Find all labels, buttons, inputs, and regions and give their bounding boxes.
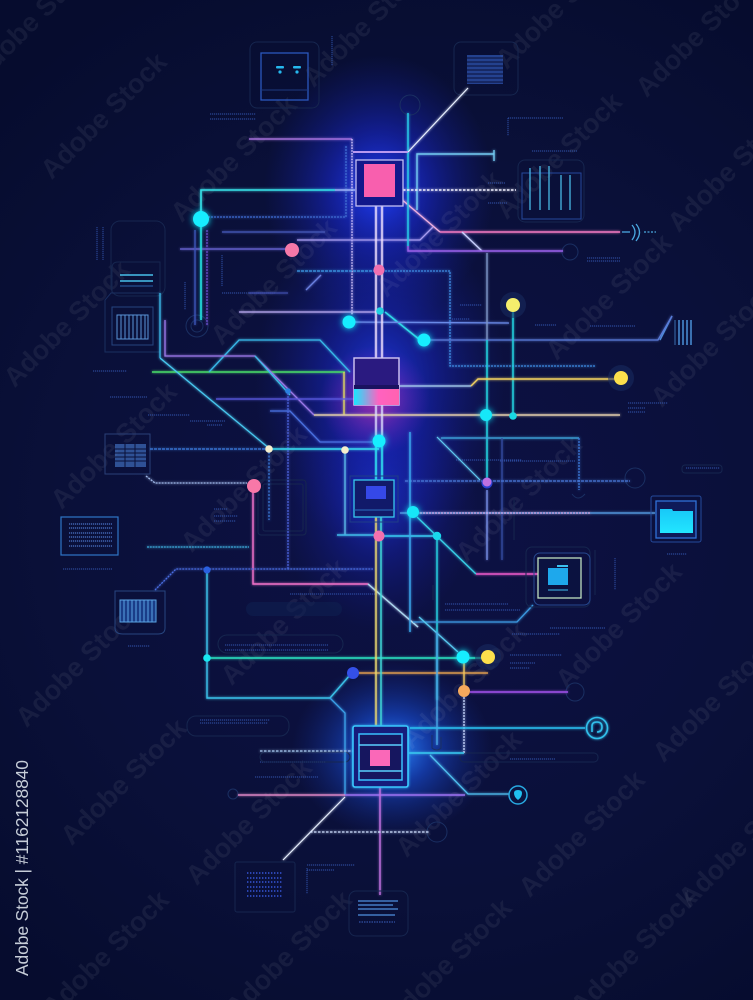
faint watermark: Adobe Stock: [550, 556, 688, 695]
chip: bottom text lines: [349, 891, 408, 936]
faint watermark: Adobe Stock: [205, 212, 343, 351]
faint watermark: Adobe Stock: [215, 552, 353, 691]
icon: sound waves: [622, 224, 656, 241]
stock id vertical text: Adobe Stock | #1162128840: [12, 760, 32, 976]
faint circle icons: [186, 95, 645, 842]
faint background frames: [187, 465, 722, 762]
node chip: bottom main: [353, 726, 408, 787]
node chip: blue module: [350, 476, 398, 522]
glow: central blue halos: [255, 55, 505, 838]
central bus: [376, 197, 382, 730]
faint watermark: Adobe Stock: [540, 227, 678, 366]
icon: eyes: [276, 66, 301, 74]
node chip: top pink: [353, 152, 408, 206]
network: lower traces: [207, 570, 585, 895]
node chip: middle gradient: [354, 358, 399, 405]
faint watermark: Adobe Stock: [45, 376, 183, 515]
faint watermark: Adobe Stock: [490, 86, 628, 225]
chip: lower-left barcode: [115, 591, 165, 634]
faint watermark: Adobe Stock: [180, 752, 318, 891]
faint watermark: Adobe Stock: [175, 419, 313, 558]
chip: left text panel: [61, 517, 118, 555]
faint watermark: Adobe Stock: [370, 164, 508, 303]
chip: left dot matrix: [105, 434, 150, 474]
chip: top-left face icon panel: [250, 42, 319, 108]
faint watermark: Adobe Stock: [165, 89, 303, 228]
network: middle traces: [146, 293, 655, 700]
nodes: connection dots: [193, 211, 634, 697]
icon: ring pin: [509, 786, 527, 804]
faint watermark: Adobe Stock: [390, 724, 528, 863]
faint watermark: Adobe Stock: [513, 764, 651, 903]
chip: bottom-left dot grid: [235, 862, 295, 912]
node chip: document right: [526, 547, 590, 607]
chip: top-right data matrix: [454, 42, 518, 95]
faint watermark: Adobe Stock: [35, 46, 173, 185]
network: upper traces: [180, 88, 672, 560]
icon: ring power: [586, 718, 608, 738]
faint watermark: Adobe Stock: [10, 594, 148, 733]
node chip: folder right: [651, 496, 701, 542]
icon: right bar chart: [660, 316, 691, 345]
faint watermark: Adobe Stock: [0, 254, 136, 393]
faint watermark: Adobe Stock: [395, 616, 533, 755]
chip: vertical bars panel: [518, 160, 584, 222]
small text-like dotted annotations: [63, 36, 720, 894]
faint watermark: Adobe Stock: [55, 712, 193, 851]
chip: left stacked lines and barcode: [105, 221, 165, 352]
faint watermark: Adobe Stock: [450, 429, 588, 568]
